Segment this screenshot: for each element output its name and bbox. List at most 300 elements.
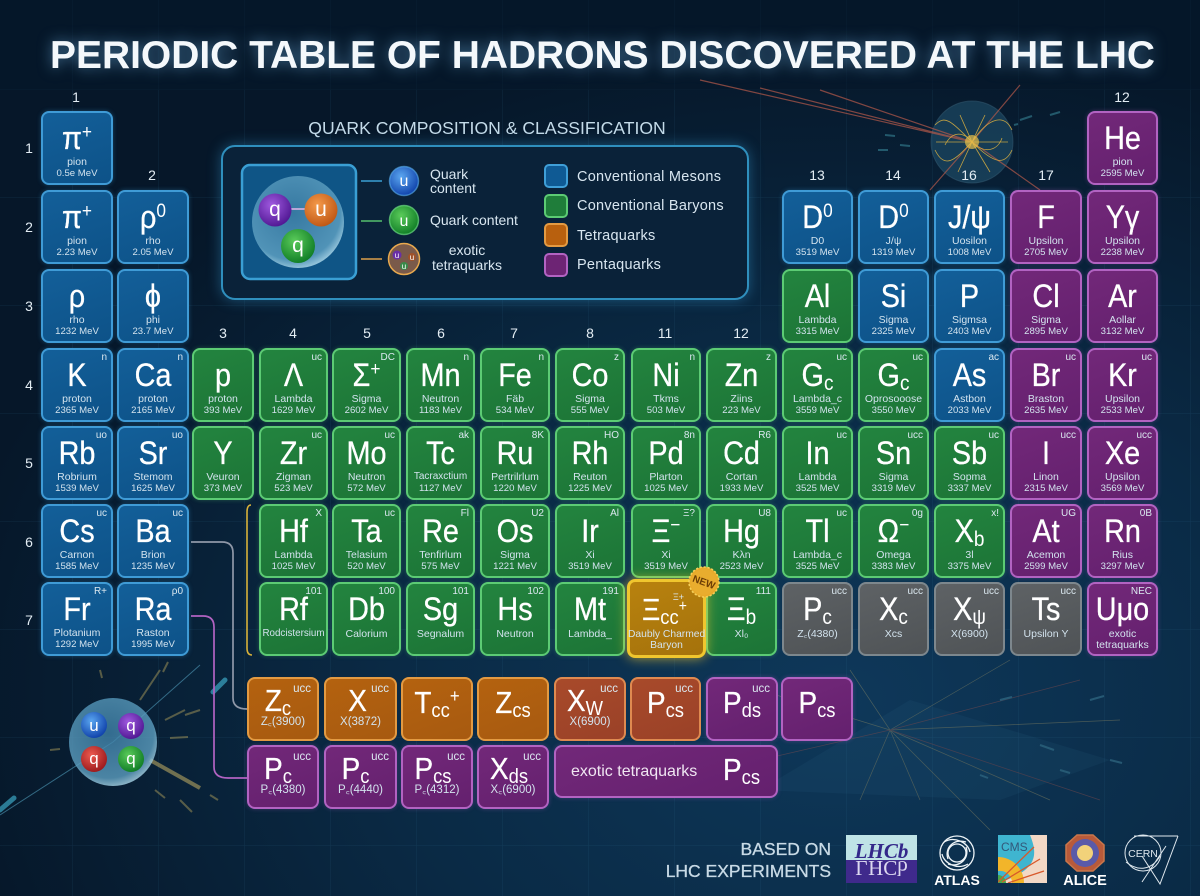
cell: pi+ row 2: pion [67,235,87,247]
cell: Mo [332,426,401,500]
cell: Rh: Rh [572,435,608,471]
highlighted cell: doubly charmed baryon: Ξcc+ [642,592,687,629]
tetraquark row: Zc: Z꜀(3900) [261,716,305,728]
cell: In: 3525 MeV [796,483,839,494]
cell: D0: 3519 MeV [796,247,839,258]
cell: Hf: Hf [279,513,308,549]
cell: rho: 1232 MeV [55,326,99,337]
cell: He: He [1104,120,1141,156]
cell: Sn: Sn [876,435,911,471]
cell: F: 2705 MeV [1024,247,1068,258]
cell: Xi- [631,504,701,578]
cell: K: n [101,352,107,363]
tetraquark row: Xw: X(6900) [570,716,610,728]
cell: Ru: Ru [497,435,533,471]
cell: Br [1010,348,1082,422]
cell: Ir: Ir [581,513,599,549]
bracket: lower block [246,504,252,656]
cell: I: ucc [1060,430,1076,441]
cell: Xc grey: ucc [907,586,923,597]
cell: Ca: 2165 MeV [131,405,175,416]
cell: Re: Re [422,513,459,549]
tetraquark row: Zc: Zc [265,683,291,720]
cell: Ca: proton [138,393,168,405]
tetraquark row: Zc: ucc [293,683,311,695]
cell: Rh [555,426,625,500]
cell: Xe [1087,426,1158,500]
cell: Sn: Sigma [879,471,908,483]
cell: Ba: uc [172,508,183,519]
cell: rho0: 2.05 MeV [132,247,174,258]
cell: Rn: 3297 MeV [1101,561,1144,572]
column numbers: 13 [809,167,825,183]
cell: pi+: 0.5e MeV [56,168,98,179]
cell: Xb [934,504,1005,578]
legend swatch: conventional baryons [544,194,568,218]
cell: Sb: Sb [952,435,987,471]
cell: Fe: 534 MeV [496,405,534,416]
cell: Br: Br [1032,357,1060,393]
cell: In [782,426,853,500]
highlighted cell: doubly charmed baryon: Ξ+ [673,592,684,602]
cell: Y gamma [1087,190,1158,264]
cell: Pc grey: Z꜀(4380) [797,628,838,640]
cell: Pc grey: ucc [831,586,847,597]
cell: Zr: Zr [280,435,307,471]
cell: Sigma+: Sigma [352,393,381,405]
cell: Ar: Ar [1108,278,1137,314]
row numbers: 2 [25,219,33,235]
cell: Hg: 2523 MeV [720,561,763,572]
cell: pi+ [41,111,113,185]
cell: Pd: 8n [684,430,695,441]
cell: Xi-: Ξ− [652,513,680,549]
cell: Ru: 1220 MeV [493,483,537,494]
cell: X psi grey: Xψ [953,591,986,629]
cell: Gc: Lambda_c [793,393,842,405]
cell: Y [192,426,254,500]
cell: Br: Braston [1028,393,1064,405]
cell: Ar: Aollar [1109,314,1136,326]
icon: tetraquark sphere: q [126,749,136,768]
tetraquark row: X: X [348,683,367,718]
cell: Gc: 3559 MeV [796,405,839,416]
cell: Xb: 3375 MeV [948,561,991,572]
pentaquark row: Xds: X꜀(6900) [491,784,535,796]
cell: U mu o: NEC [1131,586,1152,597]
cell: F: F [1037,199,1055,235]
cell: At: 2599 MeV [1024,561,1068,572]
cell: Tc: Tacraxctium [414,471,467,482]
legend diagram: quark sphere and key [240,164,518,280]
cell: Sg: Sg [423,591,458,627]
logo: LHCb [846,835,917,883]
cell: In: Lambda [799,471,836,483]
cell: Hs [480,582,550,656]
cell: Os: Sigma [500,549,530,561]
cell: Rb: Rb [59,435,95,471]
cell: I: I [1042,435,1050,471]
logo: ATLAS: ATLAS [934,872,980,888]
cell: Hg: Hg [723,513,760,549]
cell: Xi-: Ξ? [683,508,695,519]
cell: Os: Os [497,513,533,549]
column numbers: 6 [437,325,445,341]
column numbers: 3 [219,325,227,341]
cell: Mn: n [463,352,469,363]
tetraquark row: X: X(3872) [340,716,381,728]
cell: Sr: Stemom [133,471,173,483]
cell: Ca: n [177,352,183,363]
cell: He: pion [1113,156,1132,168]
cell: Tc [406,426,475,500]
cell: Ta: uc [384,508,395,519]
cell: Ts grey: ucc [1060,586,1076,597]
cell: Ni: Ni [652,357,680,393]
cell: Sb: uc [988,430,999,441]
cell: I [1010,426,1082,500]
cell: Ts grey: Upsilon Υ [1024,628,1068,640]
cell: Pd: Pd [648,435,684,471]
cell: Sr: Sr [139,435,167,471]
cell: F: Upsilon [1028,235,1064,247]
cell: Sigma+: Σ+ [353,357,380,393]
cell: Xe: Upsilon [1105,471,1140,483]
cell: Zr: Zigman [276,471,311,483]
column numbers: 1 [72,89,80,105]
pentaquark row: Pds: Pds [723,685,761,722]
cell: Hs: Neutron [496,628,534,640]
cell: Cl: Sigma [1031,314,1061,326]
cell: Si: Si [881,278,906,314]
legend diagram: quark sphere and key: u [410,253,414,262]
cell: D0: D0 [802,199,833,235]
cell: Tc: Tc [426,435,455,471]
legend diagram: quark sphere and key: u [400,173,408,190]
cell: Xb: 3l [965,549,974,561]
tetraquark row: Zc [247,677,319,741]
cell: Tc: 1127 MeV [419,483,462,494]
row numbers [25,140,33,628]
cell: Db: 100 [378,586,395,597]
pentaquark row: Pc 4440 [324,745,397,809]
pentaquark row: Pds: ucc [752,683,770,695]
row numbers: 3 [25,298,33,314]
cell: Zn: 223 MeV [722,405,761,416]
cell: Rb: uo [96,430,107,441]
cell: F [1010,190,1082,264]
highlighted cell: doubly charmed baryon [627,579,706,658]
cell: Mt [555,582,625,656]
cell: Y gamma: Upsilon [1105,235,1140,247]
cell: Rh: Reuton [573,471,607,483]
cell: Gc: uc [836,352,847,363]
cell: D0 second: J/ψ [886,235,901,247]
cell: Br: 2635 MeV [1024,405,1068,416]
cell: Zn: z [766,352,771,363]
pentaquark row: Pds [706,677,778,741]
column numbers: 14 [885,167,901,183]
cell: Rn: 0B [1140,508,1152,519]
cell: Ts grey: Ts [1032,591,1060,627]
cell: Ir: Al [610,508,619,519]
cell: Gc second: uc [912,352,923,363]
cell: X psi grey: X(6900) [951,628,988,640]
cell: Fr: Plotanium [54,627,100,639]
wide cell: exotic tetraquarks [554,745,778,798]
cell: Lambda: 1629 MeV [272,405,315,416]
cell: X psi grey: ucc [983,586,999,597]
cell: Y: 373 MeV [204,483,242,494]
cell: Cs: 1585 MeV [55,561,99,572]
column numbers: 16 [961,167,977,183]
cell: Os [480,504,550,578]
cell: Co: z [614,352,619,363]
legend swatch: pentaquarks [544,253,568,277]
cell: P: Sigmsa [952,314,987,326]
cell: P [934,269,1005,343]
cell: Fr: Fr [63,591,91,627]
pentaquark row: Pc 4380: Pc [264,751,292,788]
legend diagram: quark sphere and key: q [292,234,304,257]
cell: Co: Sigma [575,393,605,405]
cell: rho [41,269,113,343]
cell: Zr: uc [311,430,322,441]
cell: D0 second [858,190,929,264]
cell: Y gamma: Yγ [1106,199,1139,235]
cell: phi: ϕ [145,278,161,314]
cell: Xc grey: Xcs [885,628,902,640]
cell: Zn [706,348,777,422]
cell: Rf [259,582,328,656]
cell: Xc grey [858,582,929,656]
logo: CMS: CMS [1001,840,1028,854]
cell: Ba [117,504,189,578]
cell: Db: Calorium [345,628,388,640]
cell: phi: 23.7 MeV [132,326,174,337]
cell: D0 second: 1319 MeV [872,247,915,258]
column numbers: 5 [363,325,371,341]
row numbers: 6 [25,534,33,550]
cell: As: 2033 MeV [948,405,991,416]
cell: Ru [480,426,550,500]
cell: Cl: Cl [1032,278,1060,314]
cell: Xi b: 111 [756,586,771,597]
column numbers: 4 [289,325,297,341]
row numbers: 7 [25,612,33,628]
cell: Gc second: Gc [878,357,909,395]
cell: At [1010,504,1082,578]
legend diagram: quark sphere and key: tetraquarks [432,257,502,273]
logo: LHCb: LHCb [855,856,908,880]
cell: Ra: ρ0 [172,586,183,597]
pentaquark row: Pc 4380 [247,745,319,809]
cell: I: 2315 MeV [1024,483,1068,494]
column numbers: 8 [586,325,594,341]
cell: Xe: 3569 MeV [1101,483,1144,494]
cell: P: P [960,278,979,314]
cell: Sr: 1625 MeV [131,483,175,494]
cell: Ru: Pertrilrlum [491,471,539,483]
cell: Ni [631,348,701,422]
cell: Gc second: Oprosooose [865,393,922,405]
cell: Sg: 101 [452,586,469,597]
cell: Re [406,504,475,578]
footer credit [666,839,831,881]
logo: CERN: CERN [1128,848,1158,860]
cell: Ta: 520 MeV [347,561,386,572]
row numbers: 5 [25,455,33,471]
cell: Xc grey: Xc [879,591,908,629]
cell: Ba: 1235 MeV [131,561,175,572]
cell: Rh: 1225 MeV [568,483,612,494]
cell: Gc second [858,348,929,422]
cell: Mo: Mo [346,435,386,471]
cell: K: K [67,357,87,393]
cell: Zn: Ziins [730,393,753,405]
tetraquark row: Xw: ucc [600,683,618,695]
cell: Ra: 1995 MeV [131,639,175,650]
tetraquark row: Zcs [477,677,549,741]
cell: Si: 2325 MeV [872,326,915,337]
cell: Re: Tenfirlum [419,549,462,561]
tetraquark row: Xw: XW [567,683,603,720]
cell: p: 393 MeV [204,405,242,416]
cell: Y: Veuron [206,471,240,483]
cell: As: Astbon [953,393,986,405]
cell: Os: 1221 MeV [493,561,537,572]
cell: Co: 555 MeV [571,405,609,416]
icon: tetraquark sphere [69,698,157,786]
cell: K [41,348,113,422]
cell: Ni: 503 MeV [647,405,685,416]
cell: U mu o: exotic [1109,628,1136,640]
cell: U mu o: Uμo [1096,591,1149,627]
cell: rho0 [117,190,189,264]
cell: Ir [555,504,625,578]
cell: Y gamma: 2238 MeV [1101,247,1144,258]
cell: Ts grey [1010,582,1082,656]
cell: Mt: 191 [602,586,619,597]
cell: Xi-: Xi [661,549,671,561]
cell: Fe: Fäb [506,393,524,405]
cell: Kr [1087,348,1158,422]
cell: Mt: Mt [574,591,606,627]
cell: p [192,348,254,422]
cell: Cs: uc [96,508,107,519]
cell: Y: Y [213,435,233,471]
cell: pi+: π+ [62,120,92,156]
cell: Ni: n [689,352,695,363]
pentaquark row: Pc 4440: Pc [342,751,369,788]
cell: Mo: 572 MeV [347,483,386,494]
pentaquark row: Pc 4440: P꜀(4440) [338,784,383,796]
cell: Si [858,269,929,343]
cell: Rb [41,426,113,500]
cell: Xi b: Xl₀ [735,628,748,640]
cell: Lambda: Lambda [275,393,312,405]
pentaquark row: Xds: Xds [490,751,528,788]
cell: Co: Co [572,357,608,393]
cell: Zn: Zn [725,357,758,393]
column numbers: 12 [733,325,749,341]
cell: Al [782,269,853,343]
cell: Al: Al [805,278,830,314]
cell: Sn [858,426,929,500]
cell: Tl: 3525 MeV [796,561,839,572]
footer credit: LHC EXPERIMENTS [666,861,831,881]
cell: In: In [805,435,830,471]
cell: rho: rho [69,314,85,326]
cell: Fr [41,582,113,656]
cell: J/psi [934,190,1005,264]
cell: I: Linon [1033,471,1059,483]
cell: Kr: uc [1141,352,1152,363]
logo: CERN [1124,834,1178,885]
cell: Zr [259,426,328,500]
logo: ATLAS [934,835,980,888]
cell: At: UG [1061,508,1076,519]
cell: Hs: Hs [497,591,533,627]
legend diagram: quark sphere and key: exotic [449,242,485,258]
cell: Sr: uo [172,430,183,441]
cell: Cd [706,426,777,500]
highlighted cell: doubly charmed baryon: Baryon [650,640,683,651]
cell: Pc grey [782,582,853,656]
cell: Co [555,348,625,422]
cell: Rn: Rius [1112,549,1133,561]
legend swatch: conventional mesons [544,164,568,188]
cell: Cs: Cs [59,513,95,549]
cell: Br: uc [1065,352,1076,363]
cell: Omega- [858,504,929,578]
cell: Cl: 2895 MeV [1024,326,1068,337]
cell: Cs [41,504,113,578]
cell: D0 [782,190,853,264]
pentaquark row: Pcs 4312: Pcs [414,751,452,788]
cell: Pc grey: Pc [803,591,832,629]
cell: Sigma+: DC [381,352,395,363]
cell: Pd [631,426,701,500]
cell: Xe: ucc [1136,430,1152,441]
cell: Ir: 3519 MeV [568,561,612,572]
cell: Hf: 1025 MeV [272,561,315,572]
cell: X psi grey [934,582,1005,656]
cell: Tc: ak [458,430,469,441]
cell: In: uc [836,430,847,441]
cell: Fe: Fe [498,357,532,393]
connector: Ra to pentaquark row [191,615,247,779]
cell: J/psi: 1008 MeV [948,247,991,258]
cell: Mn: 1183 MeV [419,405,462,416]
icon: tetraquark sphere: u [89,716,99,735]
cell: Xb: Xb [955,513,984,551]
cell: Cd: Cd [723,435,760,471]
legend label: conventional baryons: Conventional Baryons [577,198,724,214]
row numbers: 1 [25,140,33,156]
footer credit: BASED ON [741,839,831,859]
cell: Xe: Xe [1105,435,1140,471]
pentaquark row: Pc 4440: ucc [371,751,389,763]
tetraquark row: Pcs [630,677,701,741]
cell: Mo: Neutron [348,471,385,483]
legend diagram: quark sphere and key: u [395,251,399,260]
badge: new [688,566,720,598]
cell: Ra [117,582,189,656]
cell: Rf: Rodcistersium [262,628,325,639]
cell: Ra: Ra [135,591,171,627]
legend label: tetraquarks: Tetraquarks [577,228,656,244]
